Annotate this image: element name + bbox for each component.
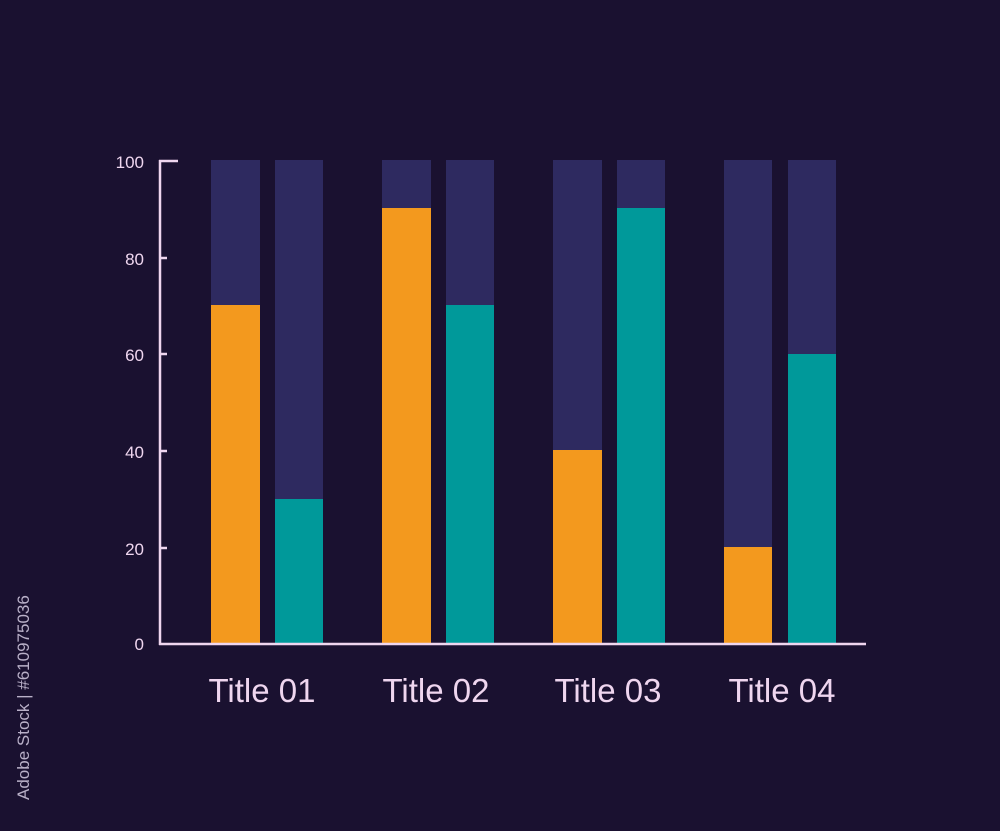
y-axis labels: 20 xyxy=(125,540,144,559)
axes xyxy=(159,160,866,645)
bar group: Title 04 xyxy=(724,160,836,644)
y-axis labels: 40 xyxy=(125,443,144,462)
x-axis labels: Title 02 xyxy=(382,672,490,709)
x-axis labels xyxy=(208,672,836,709)
bar group: Title 03 xyxy=(553,160,665,644)
y-axis labels: 0 xyxy=(135,635,144,654)
y-axis labels: 80 xyxy=(125,250,144,269)
x-axis labels: Title 03 xyxy=(554,672,662,709)
x-axis labels: Title 01 xyxy=(208,672,316,709)
stock id text: Adobe Stock | #610975036 xyxy=(14,595,33,800)
x-axis labels: Title 04 xyxy=(728,672,836,709)
bar group: Title 02 xyxy=(382,160,494,644)
bar group: Title 01 xyxy=(211,160,323,644)
y-axis labels xyxy=(116,153,144,654)
y-axis labels: 100 xyxy=(116,153,144,172)
y-axis labels: 60 xyxy=(125,346,144,365)
